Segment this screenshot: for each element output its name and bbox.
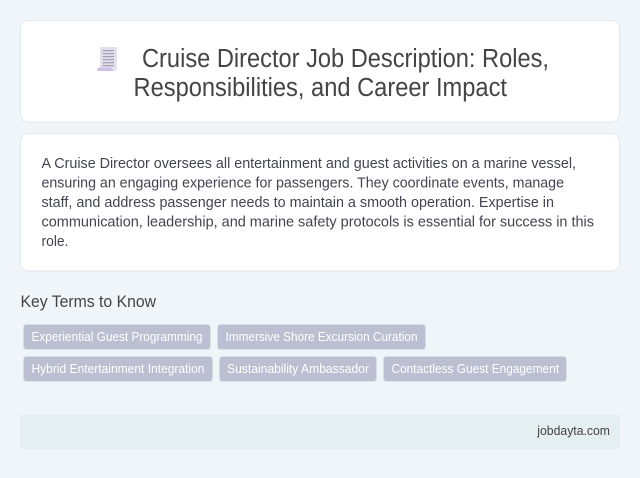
tag: Immersive Shore Excursion Curation bbox=[218, 324, 426, 350]
title: Cruise Director Job Description: Roles, bbox=[142, 45, 549, 73]
tag: Hybrid Entertainment Integration: Hybrid Entertainment Integration bbox=[32, 362, 205, 376]
panel: description card bbox=[20, 134, 620, 271]
description text: A Cruise Director oversees all entertainment and guest activities on a marine vessel, bbox=[42, 156, 576, 172]
description text: staff, and address passenger needs to maintain a smooth operation. Expertise in bbox=[42, 195, 554, 211]
title bbox=[134, 45, 549, 102]
tag: Sustainability Ambassador bbox=[220, 356, 376, 382]
tag: Experiential Guest Programming: Experiential Guest Programming bbox=[32, 330, 203, 344]
tag: Immersive Shore Excursion Curation: Immersive Shore Excursion Curation bbox=[226, 330, 418, 344]
description text: role. bbox=[42, 234, 68, 250]
tag: Sustainability Ambassador: Sustainability Ambassador bbox=[227, 362, 369, 376]
description text bbox=[42, 156, 594, 250]
heading: key terms: Key Terms to Know bbox=[20, 293, 156, 311]
icon: document scroll bbox=[97, 47, 117, 71]
tag: Contactless Guest Engagement: Contactless Guest Engagement bbox=[392, 362, 559, 376]
tag: Hybrid Entertainment Integration bbox=[24, 356, 212, 382]
tag: Experiential Guest Programming bbox=[24, 324, 210, 350]
description text: communication, leadership, and marine safety protocols is essential for success in this bbox=[42, 214, 594, 230]
tag: Contactless Guest Engagement bbox=[384, 356, 566, 382]
footer bbox=[20, 414, 620, 449]
description text: ensuring an engaging experience for passengers. They coordinate events, manage bbox=[42, 176, 564, 192]
panel: header card bbox=[20, 20, 620, 122]
footer source text: jobdayta.com bbox=[536, 424, 610, 438]
title: Responsibilities, and Career Impact bbox=[134, 74, 507, 102]
